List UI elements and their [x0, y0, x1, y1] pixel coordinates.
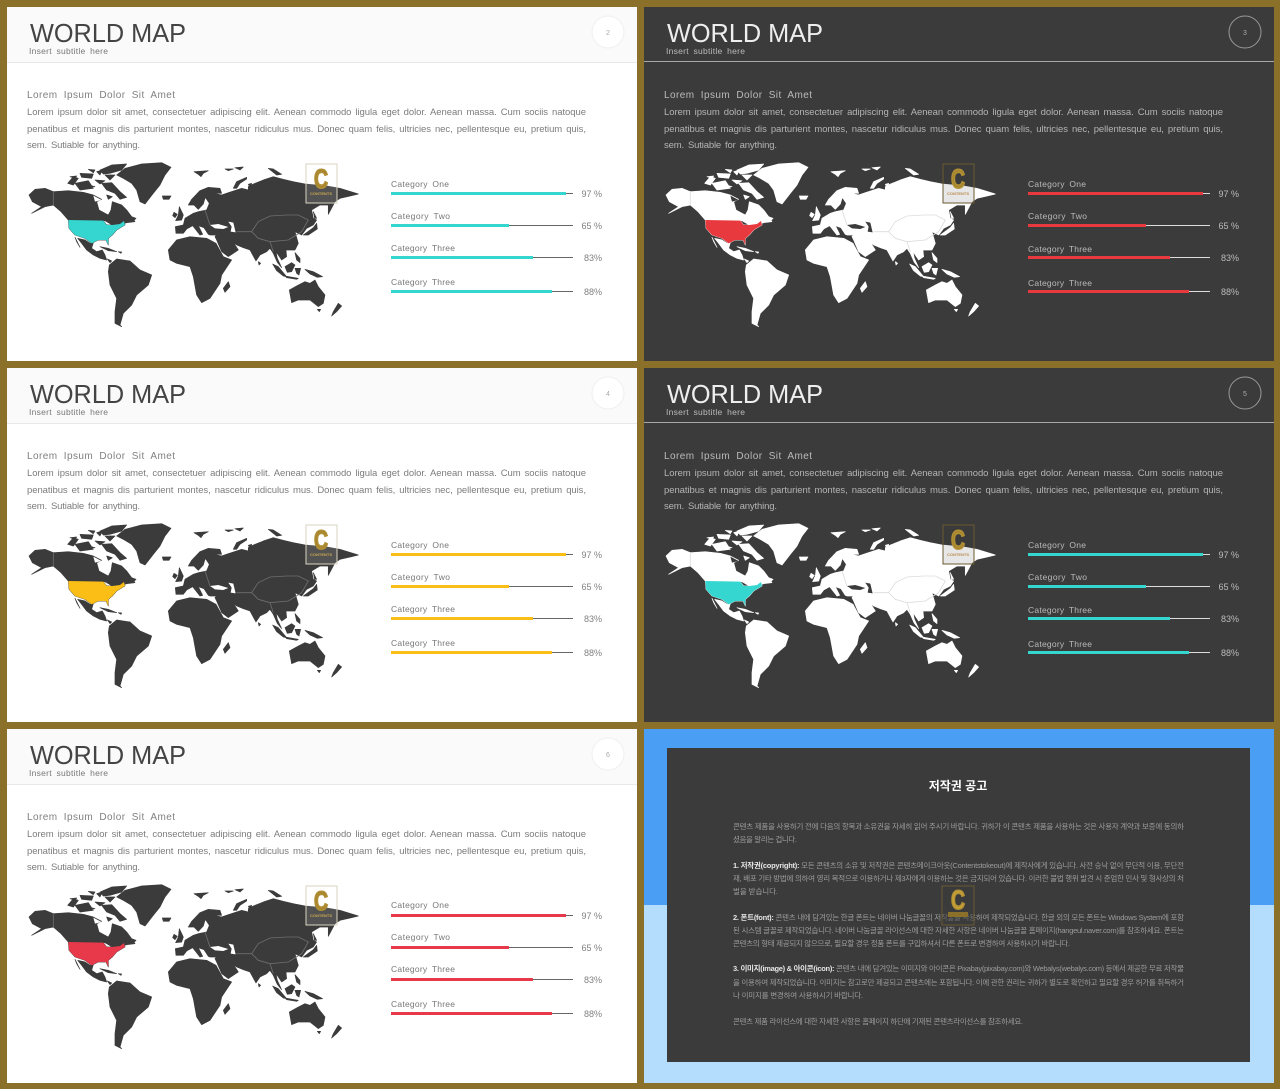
subtitle: Insert subtitle here	[29, 46, 108, 56]
panel: slide 5	[644, 368, 1274, 722]
icon: logo: C	[951, 525, 965, 555]
bar chart: Category Three	[1028, 639, 1092, 649]
body text: sem. Sutiable for anything.	[27, 140, 140, 151]
icon: logo	[306, 886, 337, 925]
heading: Lorem Ipsum Dolor Sit Amet	[664, 451, 812, 462]
panel: slide 6	[7, 729, 637, 1083]
notice text: 콘텐츠의 형태 제공되지 않으므로, 필요할 경우 정품 폰트를 구입하셔서 다른 폰트로 변경하여 사용하시기 바랍니다.	[733, 938, 1070, 948]
bar chart: 88%	[584, 287, 602, 297]
bar chart: Category Two	[1028, 572, 1087, 582]
heading: Lorem Ipsum Dolor Sit Amet	[664, 90, 812, 101]
subtitle: Insert subtitle here	[666, 407, 745, 417]
icon: logo: C	[951, 164, 965, 194]
panel: slide 4	[7, 368, 637, 722]
body text: sem. Sutiable for anything.	[664, 501, 777, 512]
body text: Lorem ipsum dolor sit amet, consectetuer adipiscing elit. Aenean commodo ligula eget dolor. Aenean massa. Cum sociis natoque	[27, 468, 586, 479]
body text: sem. Sutiable for anything.	[664, 140, 777, 151]
bar chart: Category Two	[391, 211, 450, 221]
bar chart	[1028, 540, 1239, 658]
icon: logo: CONTENTS	[310, 552, 332, 557]
body text: penatibus et magnis dis parturient montes, nascetur ridiculus mus. Donec quam felis, ultricies nec, pellentesque eu, pretium quis,	[27, 846, 586, 857]
body text: penatibus et magnis dis parturient montes, nascetur ridiculus mus. Donec quam felis, ultricies nec, pellentesque eu, pretium quis,	[27, 485, 586, 496]
page number badge	[1229, 377, 1261, 409]
body text: penatibus et magnis dis parturient montes, nascetur ridiculus mus. Donec quam felis, ultricies nec, pellentesque eu, pretium quis,	[664, 124, 1223, 135]
icon: logo	[943, 525, 974, 564]
title: WORLD MAP	[30, 381, 186, 409]
page number badge	[592, 16, 624, 48]
bar chart: Category One	[391, 540, 449, 550]
heading: Lorem Ipsum Dolor Sit Amet	[27, 812, 175, 823]
title: WORLD MAP	[667, 20, 823, 48]
bar chart: Category One	[391, 179, 449, 189]
heading: 저작권 공고	[929, 778, 987, 793]
icon: logo: CONTENTS	[310, 191, 332, 196]
world map	[666, 524, 995, 688]
panel: copyright notice	[644, 729, 1274, 1083]
icon: logo: C	[314, 525, 328, 555]
world map	[29, 163, 358, 327]
page number badge	[1229, 16, 1261, 48]
bar chart: 88%	[1221, 648, 1239, 658]
icon: logo: C	[951, 885, 965, 915]
bar chart: 97 %	[581, 550, 602, 560]
notice text: 1. 저작권(copyright): 모든 콘텐츠의 소유 및 저작권은 콘텐츠메이크아웃(Contentstokeout)에 제작사에게 있습니다. 사전 승낙 없이 무단적 이용, 무단전	[733, 860, 1184, 870]
body text: Lorem ipsum dolor sit amet, consectetuer adipiscing elit. Aenean commodo ligula eget dolor. Aenean massa. Cum sociis natoque	[27, 107, 586, 118]
body text	[27, 107, 586, 151]
bar chart: 83%	[584, 253, 602, 263]
page number badge: 2	[606, 30, 610, 37]
world map	[29, 524, 358, 688]
notice text: 셨음을 알리는 겁니다.	[733, 834, 797, 844]
subtitle: Insert subtitle here	[666, 46, 745, 56]
notice text: 나 이미지를 변경하여 사용하시기 바랍니다.	[733, 990, 863, 1000]
icon: logo: CONTENTS	[947, 191, 969, 196]
panel: slide 2	[7, 7, 637, 361]
bar chart: 97 %	[1218, 189, 1239, 199]
bar chart: Category Three	[391, 277, 455, 287]
body text: penatibus et magnis dis parturient montes, nascetur ridiculus mus. Donec quam felis, ultricies nec, pellentesque eu, pretium quis,	[27, 124, 586, 135]
body text: sem. Sutiable for anything.	[27, 862, 140, 873]
icon: logo	[942, 885, 974, 925]
bar chart	[391, 900, 602, 1019]
bar chart: 65 %	[1218, 582, 1239, 592]
body text	[664, 468, 1223, 512]
bar chart: 65 %	[581, 943, 602, 953]
bar chart: Category Three	[391, 604, 455, 614]
bar chart: Category Three	[391, 999, 455, 1009]
page number badge	[592, 738, 624, 770]
notice text: 콘텐츠 제품을 사용하기 전에 다음의 항목과 소유권을 자세히 읽어 주시기 바랍니다. 귀하가 이 콘텐츠 제품을 사용하는 것은 사용자 계약과 보증에 동의하	[733, 821, 1184, 831]
world map	[29, 885, 358, 1049]
heading: Lorem Ipsum Dolor Sit Amet	[27, 90, 175, 101]
page number badge: 4	[606, 391, 610, 398]
heading: Lorem Ipsum Dolor Sit Amet	[27, 451, 175, 462]
bar chart: 65 %	[581, 582, 602, 592]
bar chart: 83%	[584, 975, 602, 985]
icon: logo: CONTENTS	[310, 913, 332, 918]
subtitle: Insert subtitle here	[29, 407, 108, 417]
bar chart: Category One	[1028, 179, 1086, 189]
page number badge	[592, 377, 624, 409]
notice text: 벌을 받습니다.	[733, 886, 778, 896]
body text	[27, 829, 586, 873]
icon: logo	[306, 164, 337, 203]
title: WORLD MAP	[30, 742, 186, 770]
bar chart: 83%	[1221, 614, 1239, 624]
bar chart: 65 %	[581, 221, 602, 231]
body text: Lorem ipsum dolor sit amet, consectetuer adipiscing elit. Aenean commodo ligula eget dolor. Aenean massa. Cum sociis natoque	[664, 107, 1223, 118]
body text: Lorem ipsum dolor sit amet, consectetuer adipiscing elit. Aenean commodo ligula eget dolor. Aenean massa. Cum sociis natoque	[664, 468, 1223, 479]
body text	[27, 468, 586, 512]
body text: sem. Sutiable for anything.	[27, 501, 140, 512]
notice text: 을 이용하여 제작되었습니다. 이미지는 참고로만 제공되고 콘텐츠에는 포함됩니다. 이에 관한 권리는 귀하가 별도로 확인하고 필요할 경우 허가를 취득하거	[733, 977, 1184, 987]
notice text: 3. 이미지(image) & 아이콘(icon): 콘텐츠 내에 담겨있는 이미지와 아이콘은 Pixabay(pixabay.com)와 Webalys(webalys.com) 등에서 제공한 무료 저작물	[733, 963, 1184, 973]
bar chart: 65 %	[1218, 221, 1239, 231]
body text: penatibus et magnis dis parturient montes, nascetur ridiculus mus. Donec quam felis, ultricies nec, pellentesque eu, pretium quis,	[664, 485, 1223, 496]
bar chart: 88%	[584, 648, 602, 658]
bar chart: Category Three	[391, 964, 455, 974]
page number badge: 6	[606, 752, 610, 759]
bar chart: 97 %	[1218, 550, 1239, 560]
bar chart	[1028, 179, 1239, 297]
bar chart: 83%	[1221, 253, 1239, 263]
title: WORLD MAP	[667, 381, 823, 409]
bar chart: 88%	[1221, 287, 1239, 297]
icon: logo: C	[314, 164, 328, 194]
bar chart: 83%	[584, 614, 602, 624]
bar chart: Category Two	[391, 932, 450, 942]
icon: logo: C	[314, 886, 328, 916]
icon: logo	[306, 525, 337, 564]
bar chart	[391, 540, 602, 658]
notice text: 된 시스템 글꼴로 제작되었습니다. 네이버 나눔글꼴 라이선스에 대한 자세한 사항은 네이버 나눔글꼴 홈페이지(hangeul.naver.com)를 참조하세요. 폰트는	[733, 925, 1184, 935]
icon: logo: CONTENTS	[947, 552, 969, 557]
panel: slide 3	[644, 7, 1274, 361]
page number badge: 5	[1243, 391, 1247, 398]
bar chart: Category Two	[391, 572, 450, 582]
bar chart	[391, 179, 602, 297]
bar chart: Category One	[391, 900, 449, 910]
bar chart: Category Three	[1028, 278, 1092, 288]
notice text: 재, 배포 기타 방법에 의하여 영리 목적으로 이용하거나 제3자에게 이용하는 것은 금지되어 있습니다. 이러한 불법 행위 발견 시 준엄한 민사 및 형사상의 처	[733, 873, 1184, 883]
notice text: 콘텐츠 제품 라이선스에 대한 자세한 사항은 홈페이지 하단에 기재된 콘텐츠라이선스를 참조하세요.	[733, 1016, 1023, 1026]
bar chart: Category Two	[1028, 211, 1087, 221]
notice text	[733, 821, 1184, 1026]
bar chart: 88%	[584, 1009, 602, 1019]
subtitle: Insert subtitle here	[29, 768, 108, 778]
icon: logo	[943, 164, 974, 203]
notice text: 2. 폰트(font): 콘텐츠 내에 담겨있는 한글 폰트는 네이버 나눔글꼴의 저작물을 사용하여 제작되었습니다. 한글 외의 모든 폰트는 Windows System에 포함	[733, 912, 1184, 922]
title: WORLD MAP	[30, 20, 186, 48]
bar chart: 97 %	[581, 911, 602, 921]
bar chart: 97 %	[581, 189, 602, 199]
bar chart: Category Three	[391, 243, 455, 253]
page number badge: 3	[1243, 30, 1247, 37]
world map	[666, 163, 995, 327]
body text	[664, 107, 1223, 151]
bar chart: Category One	[1028, 540, 1086, 550]
bar chart: Category Three	[1028, 605, 1092, 615]
bar chart: Category Three	[391, 638, 455, 648]
bar chart: Category Three	[1028, 244, 1092, 254]
body text: Lorem ipsum dolor sit amet, consectetuer adipiscing elit. Aenean commodo ligula eget dolor. Aenean massa. Cum sociis natoque	[27, 829, 586, 840]
